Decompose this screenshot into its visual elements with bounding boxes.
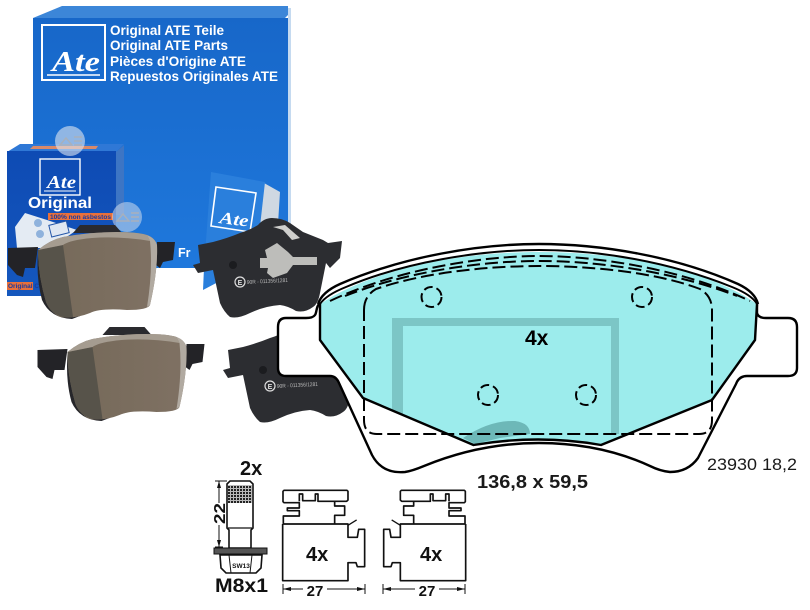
inner frame — [392, 318, 619, 444]
clip width dimension: 27 — [307, 583, 323, 600]
large blue ATE box — [33, 6, 291, 268]
approval mark: 90R - 011356/1281 — [247, 278, 288, 286]
multilingual heading — [110, 23, 278, 84]
multilingual heading: Original ATE Teile — [110, 23, 224, 38]
pad dimensions: 136,8 x 59,5 — [477, 472, 588, 492]
bolt drawing — [212, 481, 267, 573]
brake pad friction side bottom — [38, 327, 204, 421]
small blue ATE box — [7, 144, 124, 296]
technical pad drawing — [278, 244, 797, 472]
clip quantity: 4x — [306, 544, 328, 566]
leaflet card — [203, 172, 280, 290]
brake pad back side bottom — [223, 323, 372, 422]
Original label: Original — [28, 195, 92, 212]
backing plate outline — [278, 303, 797, 472]
multilingual heading: Pièces d'Origine ATE — [110, 54, 246, 69]
friction material — [320, 252, 757, 445]
top arcs — [318, 244, 758, 304]
pad illustration on small box — [15, 213, 77, 248]
wrench size: SW13 — [232, 563, 250, 570]
dashed top arcs — [330, 256, 750, 301]
asbestos label: 100% non asbestos — [50, 214, 111, 221]
dashed contour — [364, 266, 712, 434]
dashed holes — [422, 287, 652, 405]
multilingual heading: Repuestos Originales ATE — [110, 69, 278, 84]
bolt quantity: 2x — [240, 458, 262, 480]
ATE logo on small box: Ate — [46, 172, 76, 192]
brake pad back side top — [193, 218, 342, 318]
clip width dimension: 27 — [419, 583, 435, 600]
approval mark — [265, 381, 318, 391]
watermark circles — [55, 126, 142, 232]
brake pad friction side top — [8, 225, 175, 319]
part number: 23930 18,2 — [707, 455, 797, 474]
approval mark — [235, 277, 288, 287]
ATE logo on small box — [40, 159, 80, 195]
orange footer label: Original C — [8, 283, 39, 290]
Fr text on large box: Fr — [178, 246, 191, 260]
ATE logo on large box — [42, 25, 105, 80]
multilingual heading: Original ATE Parts — [110, 38, 228, 53]
leaflet card: Ate — [217, 208, 250, 231]
clip quantity: 4x — [420, 544, 442, 566]
approval mark: 90R - 011356/1281 — [277, 382, 318, 390]
bolt thread size: M8x1 — [215, 576, 268, 597]
friction outline — [320, 304, 757, 445]
quantity 4x: 4x — [525, 327, 549, 350]
left clip drawing — [283, 490, 365, 600]
approval mark: E — [268, 384, 273, 391]
right clip drawing — [383, 490, 466, 600]
ATE logo on large box: Ate — [50, 46, 100, 78]
approval mark: E — [238, 280, 243, 287]
bolt length dimension: 22 — [212, 503, 229, 524]
